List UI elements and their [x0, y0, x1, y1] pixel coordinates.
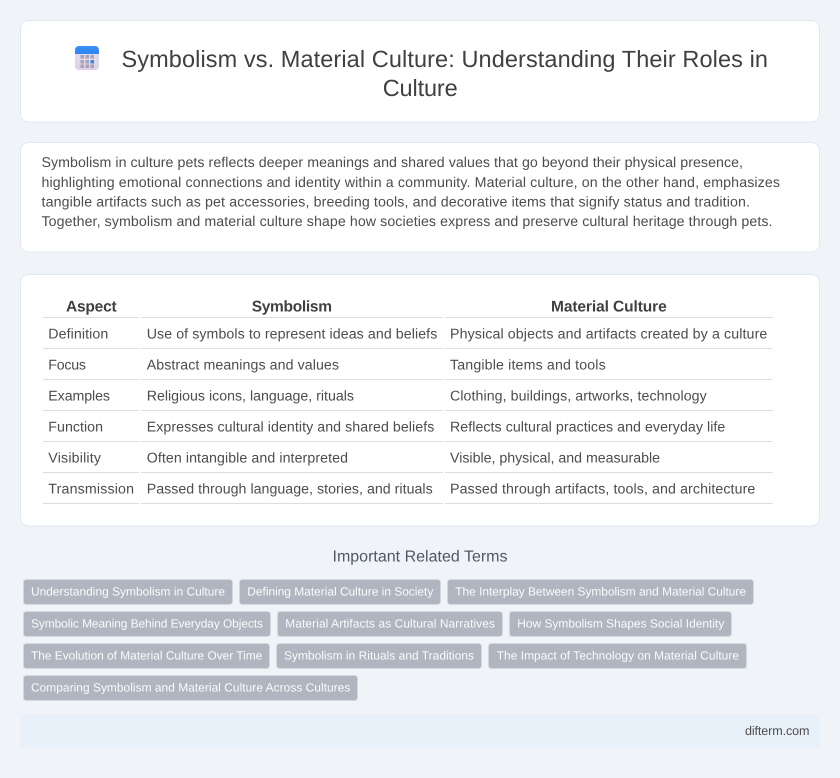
table row: focus: Abstract meanings and values	[147, 358, 339, 374]
footer: difterm.com	[745, 724, 810, 738]
tag: symbolic meaning: Symbolic Meaning Behind Everyday Objects	[31, 616, 263, 630]
footer	[20, 714, 820, 748]
tag: evolution: The Evolution of Material Culture Over Time	[31, 648, 263, 662]
table row: definition: Physical objects and artifacts created by a culture	[450, 326, 767, 342]
tag: rituals and traditions	[276, 644, 482, 668]
table row: visibility: Visible, physical, and measurable	[450, 450, 660, 466]
tag: symbolic meaning	[24, 612, 270, 636]
tag: interplay: The Interplay Between Symbolism and Material Culture	[455, 584, 746, 598]
tag: comparing across cultures	[24, 676, 358, 700]
tag: social identity	[510, 612, 732, 636]
tag: defining material culture: Defining Material Culture in Society	[247, 584, 433, 598]
table header row	[43, 298, 773, 318]
table row: function	[43, 420, 773, 442]
table row: function: Expresses cultural identity and shared beliefs	[147, 420, 434, 436]
table header row: Aspect	[66, 298, 117, 316]
tag: understanding symbolism	[24, 580, 232, 604]
table row: focus: Focus	[48, 358, 86, 374]
table row: definition	[43, 326, 773, 348]
table row: examples: Examples	[48, 388, 110, 404]
tag: evolution	[24, 644, 270, 668]
table row: focus	[43, 358, 773, 380]
tag: material artifacts: Material Artifacts as Cultural Narratives	[285, 616, 495, 630]
table row: focus: Tangible items and tools	[450, 358, 606, 374]
table row: visibility: Visibility	[48, 450, 102, 466]
icon: calendar	[75, 46, 99, 70]
tag: comparing across cultures: Comparing Symbolism and Material Culture Across Cultures	[31, 680, 350, 694]
tag: impact of technology	[488, 644, 746, 668]
tag: understanding symbolism: Understanding Symbolism in Culture	[31, 584, 225, 598]
table row: examples	[43, 388, 773, 410]
table row: transmission: Passed through artifacts, tools, and architecture	[450, 482, 755, 498]
text block: summary paragraph: Symbolism in culture pets reflects deeper meanings and shared values that go beyond their physical presence,	[42, 155, 743, 171]
table row: transmission	[43, 482, 773, 504]
tag: defining material culture	[240, 580, 440, 604]
tag: material artifacts	[278, 612, 502, 636]
table row: definition: Use of symbols to represent ideas and beliefs	[147, 326, 437, 342]
table row: transmission: Transmission	[48, 482, 134, 498]
table row: definition: Definition	[48, 326, 108, 342]
table header row: Material Culture	[551, 298, 667, 316]
table header row: Symbolism	[252, 298, 332, 316]
text block: summary paragraph: Together, symbolism and material culture shape how societies express and preserve cultural heritage through pets.	[42, 214, 772, 230]
tag: rituals and traditions: Symbolism in Rituals and Traditions	[284, 648, 474, 662]
table row: transmission: Passed through language, stories, and rituals	[147, 482, 433, 498]
tag: impact of technology: The Impact of Technology on Material Culture	[497, 648, 739, 662]
tag: interplay	[448, 580, 754, 604]
table row: examples: Religious icons, language, rituals	[147, 388, 354, 404]
table row: function: Reflects cultural practices and everyday life	[450, 420, 725, 436]
panel: header	[20, 20, 820, 122]
title: Symbolism vs. Material Culture: Understanding Their Roles in	[122, 46, 768, 72]
title	[122, 46, 768, 101]
panel: introduction	[20, 142, 820, 252]
panel: comparison table	[20, 274, 820, 526]
text block: summary paragraph: tangible artifacts such as pet accessories, breeding tools, and decorative items that signify status and tradition.	[42, 194, 750, 210]
table row: visibility	[43, 450, 773, 472]
title: Culture	[383, 75, 458, 101]
tag: social identity: How Symbolism Shapes Social Identity	[517, 616, 724, 630]
table row: visibility: Often intangible and interpreted	[147, 450, 348, 466]
table row: examples: Clothing, buildings, artworks, technology	[450, 388, 708, 404]
heading: important related terms: Important Related Terms	[332, 548, 508, 566]
table row: function: Function	[48, 420, 103, 436]
text block: summary paragraph: highlighting emotional connections and identity within a community. Material culture, on the other hand, emphasizes	[42, 175, 780, 191]
related terms tags	[24, 580, 754, 700]
text block: summary paragraph	[42, 155, 780, 230]
